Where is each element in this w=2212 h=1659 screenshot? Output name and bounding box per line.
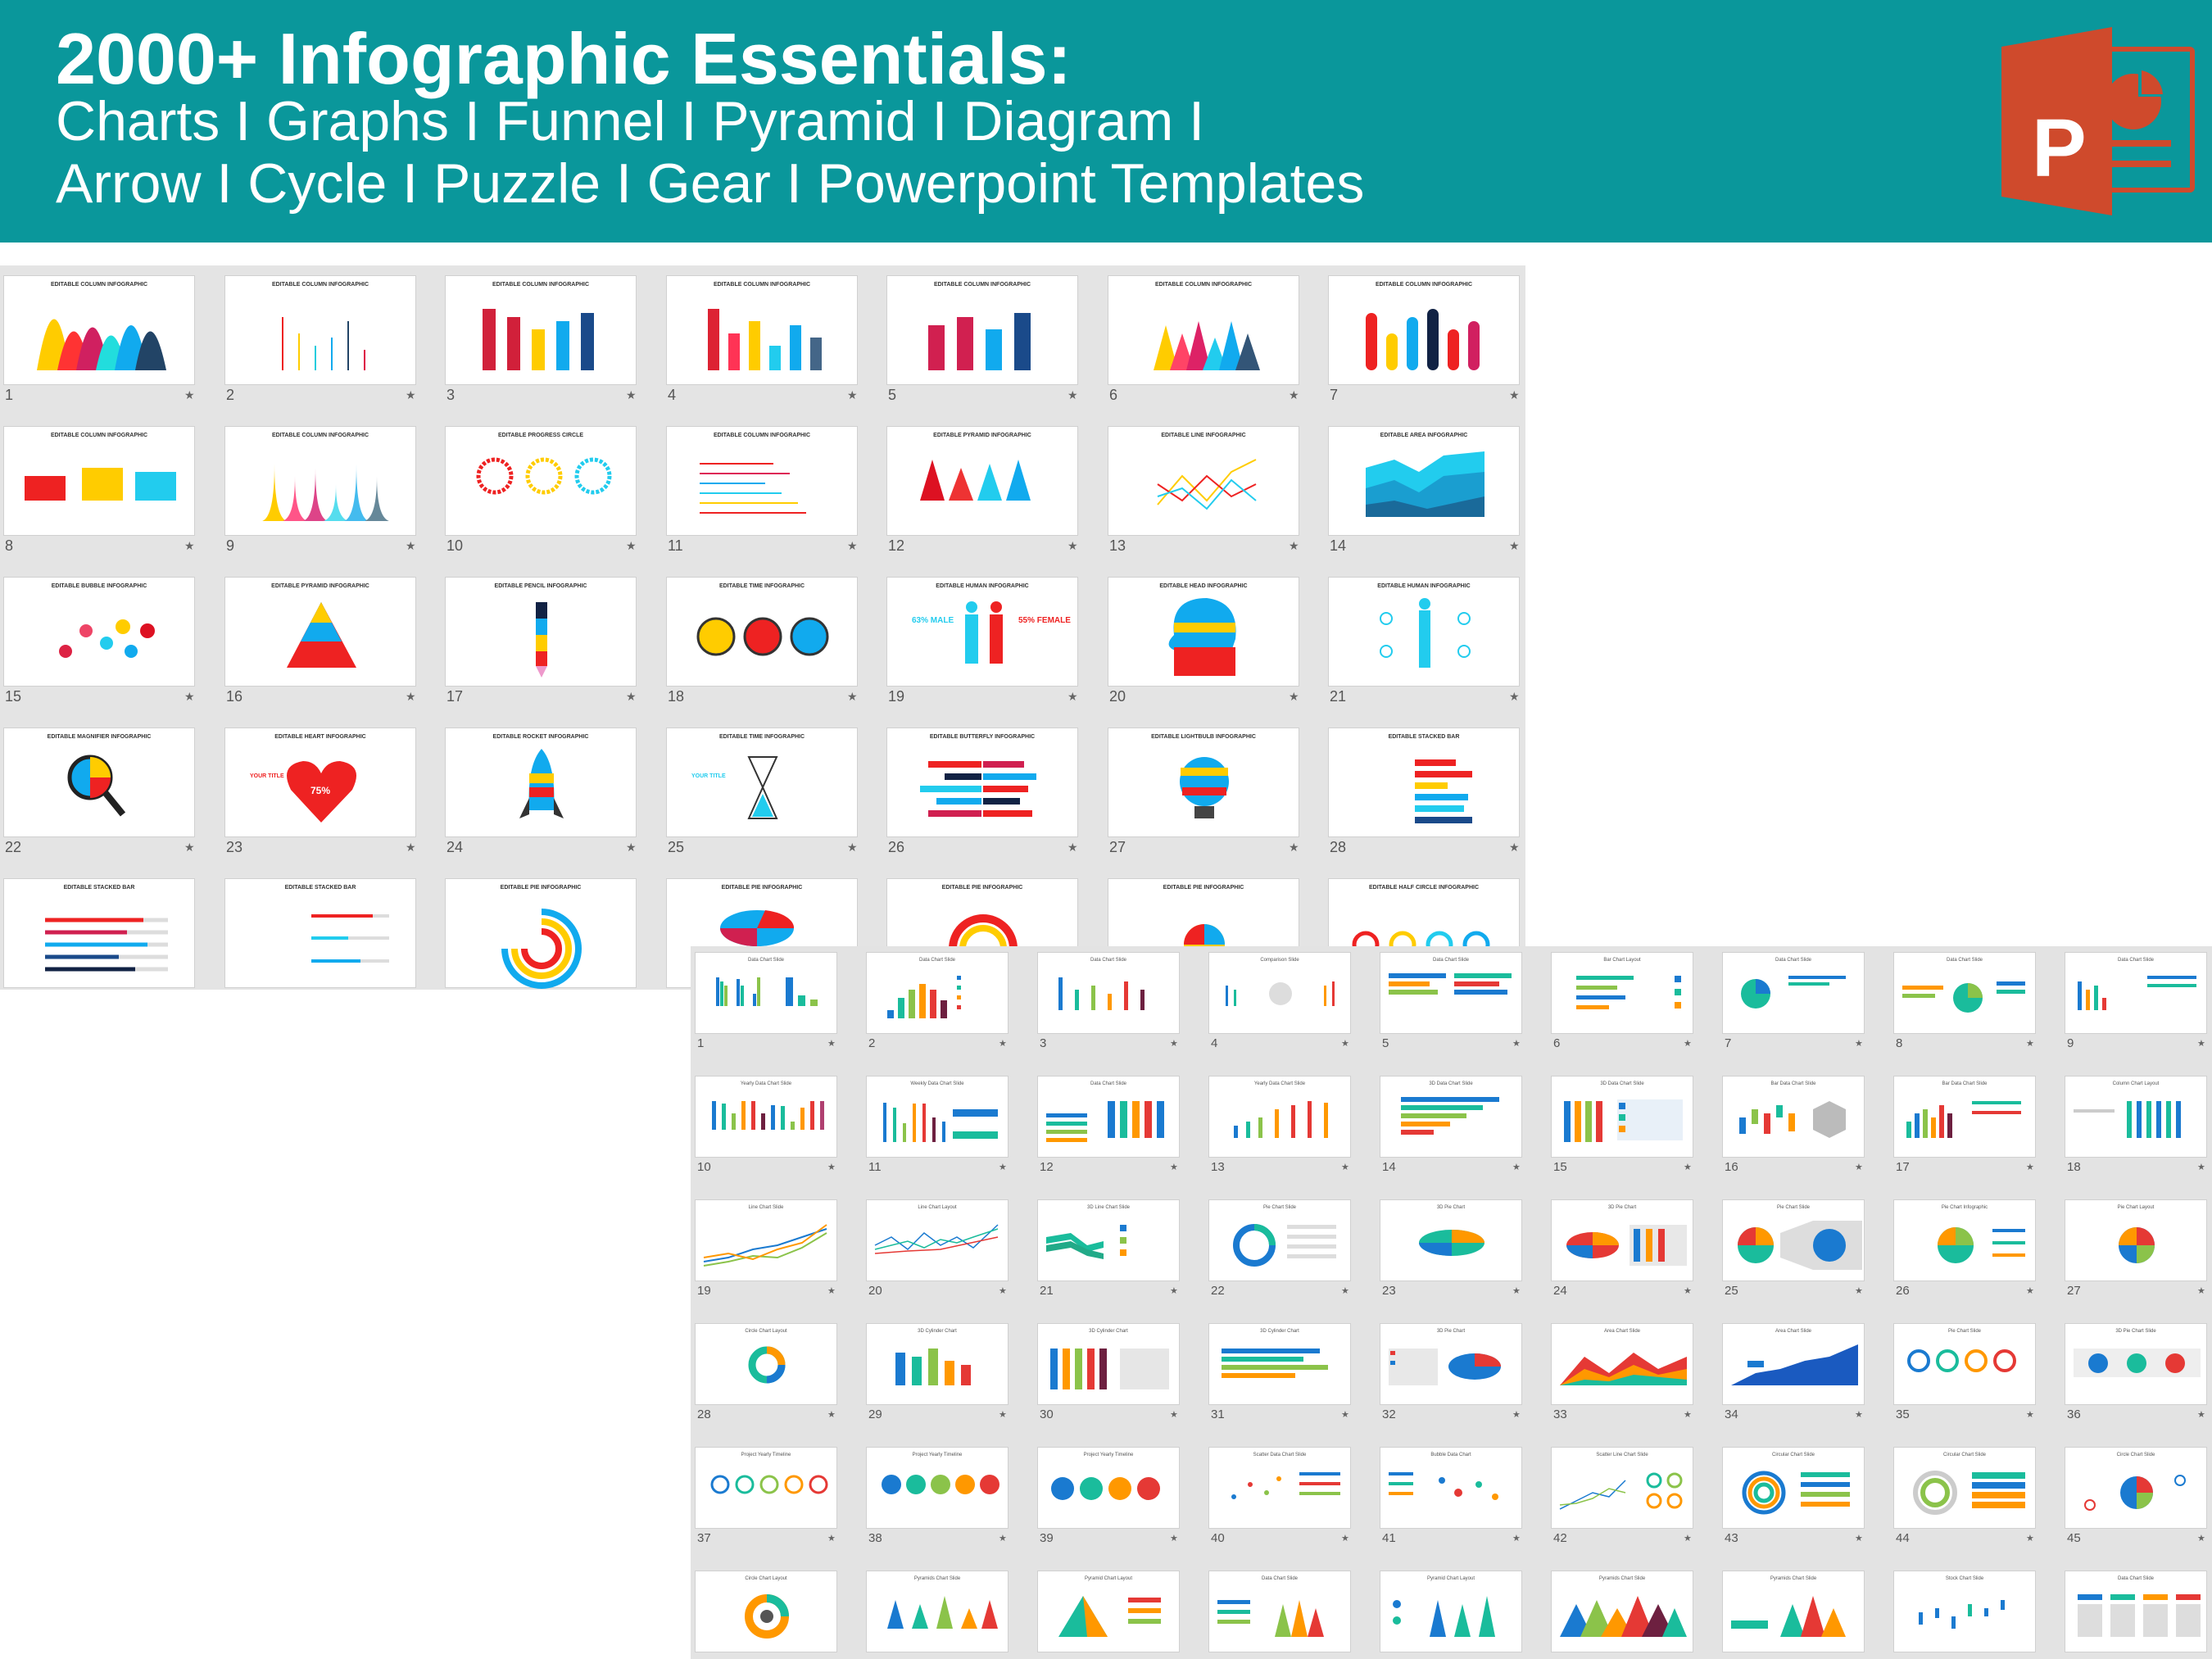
thumb 31: [445, 878, 637, 988]
slide numbers top grid: 18: [668, 688, 684, 705]
thumb 1: [3, 275, 195, 385]
row 6 thumbs: Pyramid Chart Layout: [1085, 1576, 1132, 1581]
slide numbers top grid: ★: [406, 539, 416, 552]
thumb 35: EDITABLE HALF CIRCLE INFOGRAPHIC: [1369, 885, 1479, 891]
slide numbers bottom grid: ★: [827, 1039, 836, 1049]
row 1 thumbs: Data Chart Slide: [919, 958, 955, 963]
thumb 21: EDITABLE HUMAN INFOGRAPHIC: [1377, 583, 1471, 589]
row 3 thumbs: Pie Chart Layout: [2118, 1205, 2154, 1210]
slide numbers bottom grid: ★: [2197, 1286, 2205, 1296]
row 2 thumbs: [695, 1076, 2207, 1158]
slide numbers bottom grid: 36: [2067, 1407, 2081, 1421]
row 1 thumbs: Data Chart Slide: [1775, 958, 1811, 963]
slide numbers top grid: ★: [626, 388, 637, 401]
slide numbers top grid: 21: [1330, 688, 1346, 705]
row 1 thumbs: Data Chart Slide: [2118, 958, 2154, 963]
row 3 thumbs: Line Chart Slide: [749, 1205, 783, 1210]
thumb 16: [224, 577, 416, 687]
thumb 21: [1328, 577, 1520, 687]
slide numbers top grid: 5: [888, 387, 896, 403]
thumb 10: [445, 426, 637, 536]
row 1 thumbs: [695, 952, 2207, 1034]
thumb 2: EDITABLE COLUMN INFOGRAPHIC: [272, 282, 369, 288]
thumb 35: [1328, 878, 1520, 988]
row 3 thumbs: [695, 1199, 2207, 1281]
thumb 6: [1108, 275, 1299, 385]
thumb 5: EDITABLE COLUMN INFOGRAPHIC: [934, 282, 1031, 288]
row 2 thumbs: 3D Data Chart Slide: [1429, 1081, 1473, 1086]
slide numbers bottom grid: 44: [1896, 1531, 1910, 1545]
thumb 7: [1328, 275, 1520, 385]
slide numbers bottom grid: ★: [2026, 1163, 2034, 1172]
slide numbers bottom grid: ★: [1684, 1286, 1692, 1296]
slide numbers bottom grid: 16: [1725, 1160, 1738, 1174]
slide numbers bottom grid: 4: [1211, 1036, 1217, 1050]
slide numbers top grid: ★: [406, 690, 416, 703]
slide numbers top grid: ★: [1289, 841, 1299, 854]
slide numbers bottom grid: ★: [1855, 1039, 1863, 1049]
row 4 thumbs: 3D Pie Chart Slide: [2115, 1329, 2156, 1334]
slide numbers bottom grid: ★: [827, 1163, 836, 1172]
slide numbers top grid: ★: [184, 841, 195, 854]
slide numbers top grid: 24: [446, 839, 463, 855]
slide numbers bottom grid: 15: [1553, 1160, 1567, 1174]
slide numbers bottom grid: 26: [1896, 1284, 1910, 1298]
subtitle line 2: Arrow I Cycle I Puzzle I Gear I Powerpoint Templates: [56, 152, 1364, 215]
slide numbers bottom grid: 30: [1040, 1407, 1054, 1421]
slide numbers top grid: ★: [1289, 388, 1299, 401]
slide numbers top grid: ★: [1509, 388, 1520, 401]
slide numbers top grid: 26: [888, 839, 904, 855]
thumb 19: 63% MALE: [912, 616, 954, 625]
header band: [0, 0, 2212, 243]
row 6 thumbs: Circle Chart Layout: [745, 1576, 787, 1581]
title: 2000+ Infographic Essentials:: [56, 18, 1072, 99]
slide numbers top grid: 19: [888, 688, 904, 705]
thumb 31: EDITABLE PIE INFOGRAPHIC: [501, 885, 581, 891]
slide numbers bottom grid: ★: [1170, 1163, 1178, 1172]
thumb 28: EDITABLE STACKED BAR: [1389, 734, 1459, 740]
row 2 thumbs: Yearly Data Chart Slide: [741, 1081, 791, 1086]
thumb 13: [1108, 426, 1299, 536]
slide numbers bottom grid: ★: [2197, 1039, 2205, 1049]
row 4 thumbs: Area Chart Slide: [1775, 1329, 1811, 1334]
slide numbers bottom grid: 25: [1725, 1284, 1738, 1298]
row 4 thumbs: [695, 1323, 2207, 1405]
row 3 thumbs: Line Chart Layout: [918, 1205, 957, 1210]
slide numbers bottom grid: ★: [1512, 1410, 1521, 1420]
slide numbers top grid: 4: [668, 387, 676, 403]
thumb 34: EDITABLE PIE INFOGRAPHIC: [1163, 885, 1244, 891]
slide numbers top grid: 17: [446, 688, 463, 705]
slide numbers top grid: 1: [5, 387, 13, 403]
slide numbers top grid: ★: [847, 841, 858, 854]
slide numbers bottom grid: 23: [1382, 1284, 1396, 1298]
row 6 thumbs: Pyramid Chart Layout: [1427, 1576, 1475, 1581]
slide numbers bottom grid: 17: [1896, 1160, 1910, 1174]
slide numbers top grid: ★: [184, 388, 195, 401]
thumb 34: [1108, 878, 1299, 988]
row 2 thumbs: Yearly Data Chart Slide: [1254, 1081, 1305, 1086]
thumb 8: [3, 426, 195, 536]
thumb 2: [224, 275, 416, 385]
slide numbers bottom grid: 18: [2067, 1160, 2081, 1174]
thumb 10: EDITABLE PROGRESS CIRCLE: [498, 433, 583, 438]
thumb 23: [224, 728, 416, 837]
slide numbers top grid: ★: [626, 690, 637, 703]
slide numbers bottom grid: 3: [1040, 1036, 1046, 1050]
slide numbers bottom grid: 35: [1896, 1407, 1910, 1421]
thumb 19: [886, 577, 1078, 687]
row 5 thumbs: Scatter Line Chart Slide: [1596, 1453, 1648, 1457]
thumb 17: EDITABLE PENCIL INFOGRAPHIC: [495, 583, 587, 589]
slide numbers bottom grid: 45: [2067, 1531, 2081, 1545]
slide numbers bottom grid: 40: [1211, 1531, 1225, 1545]
row 5 thumbs: Circular Chart Slide: [1772, 1453, 1815, 1457]
thumb 29: [3, 878, 195, 988]
row 4 thumbs: Circle Chart Layout: [745, 1329, 787, 1334]
slide numbers top grid: 9: [226, 537, 234, 554]
slide numbers bottom grid: 39: [1040, 1531, 1054, 1545]
row 5 thumbs: [695, 1447, 2207, 1529]
slide numbers bottom grid: ★: [2026, 1410, 2034, 1420]
thumb 19: 55% FEMALE: [1018, 616, 1071, 625]
row 3 thumbs: 3D Pie Chart: [1608, 1205, 1636, 1210]
slide numbers bottom grid: ★: [999, 1163, 1007, 1172]
slide numbers bottom grid: ★: [1512, 1286, 1521, 1296]
thumb 24: [445, 728, 637, 837]
thumb 24: EDITABLE ROCKET INFOGRAPHIC: [493, 734, 588, 740]
slide numbers bottom grid: ★: [999, 1039, 1007, 1049]
row 1 thumbs: Data Chart Slide: [1947, 958, 1983, 963]
slide numbers bottom grid: 29: [868, 1407, 882, 1421]
icon: powerpoint logo: [2001, 27, 2195, 215]
row 4 thumbs: 3D Cylinder Chart: [1089, 1329, 1128, 1334]
slide numbers top grid: 20: [1109, 688, 1126, 705]
thumb 15: EDITABLE BUBBLE INFOGRAPHIC: [52, 583, 147, 589]
slide numbers bottom grid: 41: [1382, 1531, 1396, 1545]
slide numbers top grid: ★: [847, 539, 858, 552]
row 1 thumbs: Data Chart Slide: [1090, 958, 1126, 963]
row 5 thumbs: Scatter Data Chart Slide: [1253, 1453, 1306, 1457]
thumb 22: EDITABLE MAGNIFIER INFOGRAPHIC: [48, 734, 151, 740]
slide numbers top grid: 2: [226, 387, 234, 403]
slide numbers bottom grid: 27: [2067, 1284, 2081, 1298]
thumb 9: [224, 426, 416, 536]
icon: powerpoint logo: P: [2032, 102, 2087, 194]
thumb 7: EDITABLE COLUMN INFOGRAPHIC: [1376, 282, 1472, 288]
row 2 thumbs: Data Chart Slide: [1090, 1081, 1126, 1086]
slide numbers bottom grid: ★: [1341, 1163, 1349, 1172]
slide numbers bottom grid: 13: [1211, 1160, 1225, 1174]
slide numbers bottom grid: 42: [1553, 1531, 1567, 1545]
slide numbers bottom grid: ★: [1855, 1286, 1863, 1296]
thumb 16: EDITABLE PYRAMID INFOGRAPHIC: [271, 583, 369, 589]
row 6 thumbs: Pyramids Chart Slide: [914, 1576, 960, 1581]
slide numbers top grid: ★: [626, 539, 637, 552]
thumb 6: EDITABLE COLUMN INFOGRAPHIC: [1155, 282, 1252, 288]
thumb 18: EDITABLE TIME INFOGRAPHIC: [719, 583, 805, 589]
thumb 20: EDITABLE HEAD INFOGRAPHIC: [1159, 583, 1248, 589]
slide numbers top grid: 3: [446, 387, 455, 403]
slide numbers bottom grid: ★: [1855, 1410, 1863, 1420]
slide numbers top grid: 8: [5, 537, 13, 554]
slide numbers bottom grid: ★: [1341, 1410, 1349, 1420]
panel: bottom slide grid: [691, 946, 2212, 1659]
row 4 thumbs: 3D Cylinder Chart: [918, 1329, 957, 1334]
slide numbers bottom grid: 9: [2067, 1036, 2074, 1050]
slide numbers bottom grid: 14: [1382, 1160, 1396, 1174]
slide numbers bottom grid: 11: [868, 1160, 882, 1174]
row 1 thumbs: Data Chart Slide: [1433, 958, 1469, 963]
thumb 29: EDITABLE STACKED BAR: [64, 885, 134, 891]
thumb 5: [886, 275, 1078, 385]
slide numbers bottom grid: ★: [1855, 1163, 1863, 1172]
slide numbers bottom grid: ★: [1170, 1286, 1178, 1296]
row 5 thumbs: Project Yearly Timeline: [913, 1453, 962, 1457]
slide numbers bottom grid: 8: [1896, 1036, 1902, 1050]
row 5 thumbs: Circular Chart Slide: [1943, 1453, 1986, 1457]
slide numbers bottom grid: ★: [999, 1534, 1007, 1543]
thumb 28: [1328, 728, 1520, 837]
thumb 1: EDITABLE COLUMN INFOGRAPHIC: [51, 282, 147, 288]
slide numbers bottom grid: 24: [1553, 1284, 1567, 1298]
slide numbers top grid: ★: [184, 690, 195, 703]
row 5 thumbs: Circle Chart Slide: [2117, 1453, 2155, 1457]
slide numbers bottom grid: 19: [697, 1284, 711, 1298]
slide numbers top grid: 7: [1330, 387, 1338, 403]
thumb 3: EDITABLE COLUMN INFOGRAPHIC: [492, 282, 589, 288]
thumb 15: [3, 577, 195, 687]
row 6 thumbs: Pyramids Chart Slide: [1770, 1576, 1816, 1581]
slide numbers bottom grid: ★: [2026, 1039, 2034, 1049]
slide numbers top grid: ★: [1509, 539, 1520, 552]
thumb 4: EDITABLE COLUMN INFOGRAPHIC: [714, 282, 810, 288]
slide numbers bottom grid: 21: [1040, 1284, 1054, 1298]
row 5 thumbs: Project Yearly Timeline: [741, 1453, 791, 1457]
slide numbers bottom grid: ★: [1684, 1534, 1692, 1543]
slide numbers top grid: ★: [626, 841, 637, 854]
thumb 13: EDITABLE LINE INFOGRAPHIC: [1161, 433, 1246, 438]
row 2 thumbs: Column Chart Layout: [2113, 1081, 2159, 1086]
slide numbers top grid: ★: [406, 388, 416, 401]
row 6 thumbs: Data Chart Slide: [2118, 1576, 2154, 1581]
slide numbers bottom grid: 1: [697, 1036, 704, 1050]
row 3 thumbs: Pie Chart Slide: [1777, 1205, 1810, 1210]
slide numbers bottom grid: ★: [1341, 1286, 1349, 1296]
slide numbers top grid: 14: [1330, 537, 1346, 554]
row 3 thumbs: 3D Pie Chart: [1437, 1205, 1465, 1210]
slide numbers top grid: ★: [1067, 388, 1078, 401]
slide numbers top grid: 13: [1109, 537, 1126, 554]
subtitle line 1: Charts I Graphs I Funnel I Pyramid I Diagram I: [56, 90, 1204, 152]
slide numbers top grid: 15: [5, 688, 21, 705]
slide numbers bottom grid: ★: [1170, 1039, 1178, 1049]
row 1 thumbs: Data Chart Slide: [748, 958, 784, 963]
slide numbers bottom grid: ★: [827, 1410, 836, 1420]
thumb 25: [666, 728, 858, 837]
slide numbers top grid: [5, 387, 1520, 855]
slide numbers bottom grid: ★: [1512, 1534, 1521, 1543]
slide numbers top grid: 6: [1109, 387, 1117, 403]
thumb 8: EDITABLE COLUMN INFOGRAPHIC: [51, 433, 147, 438]
slide numbers bottom grid: 12: [1040, 1160, 1054, 1174]
row 3 thumbs: Pie Chart Slide: [1263, 1205, 1296, 1210]
slide numbers bottom grid: 7: [1725, 1036, 1731, 1050]
slide numbers bottom grid: ★: [1684, 1039, 1692, 1049]
slide numbers bottom grid: 32: [1382, 1407, 1396, 1421]
slide numbers top grid: ★: [847, 388, 858, 401]
slide numbers bottom grid: ★: [1341, 1534, 1349, 1543]
row 2 thumbs: Bar Data Chart Slide: [1770, 1081, 1816, 1086]
slide numbers bottom grid: ★: [1512, 1163, 1521, 1172]
slide numbers top grid: 12: [888, 537, 904, 554]
slide numbers bottom grid: 28: [697, 1407, 711, 1421]
thumb 3: [445, 275, 637, 385]
row 4 thumbs: 3D Cylinder Chart: [1260, 1329, 1299, 1334]
row 6 thumbs: Pyramids Chart Slide: [1599, 1576, 1645, 1581]
slide numbers bottom grid: ★: [2197, 1410, 2205, 1420]
slide numbers bottom grid: ★: [2197, 1534, 2205, 1543]
slide numbers top grid: 10: [446, 537, 463, 554]
row 4 thumbs: Area Chart Slide: [1604, 1329, 1640, 1334]
row 2 thumbs: 3D Data Chart Slide: [1600, 1081, 1644, 1086]
slide numbers bottom grid: ★: [1855, 1534, 1863, 1543]
thumb 30: [224, 878, 416, 988]
slide numbers bottom grid: ★: [1170, 1410, 1178, 1420]
slide numbers top grid: 11: [668, 537, 683, 554]
row 5 thumbs: Project Yearly Timeline: [1084, 1453, 1133, 1457]
thumb 26: [886, 728, 1078, 837]
row 5 thumbs: Bubble Data Chart: [1430, 1453, 1471, 1457]
row 2 thumbs: Weekly Data Chart Slide: [910, 1081, 964, 1086]
slide numbers top grid: 16: [226, 688, 243, 705]
row 6 thumbs: [695, 1571, 2207, 1652]
slide numbers bottom grid: 20: [868, 1284, 882, 1298]
slide numbers bottom grid: 2: [868, 1036, 875, 1050]
slide numbers bottom grid: 43: [1725, 1531, 1738, 1545]
slide numbers bottom grid: ★: [1341, 1039, 1349, 1049]
slide numbers bottom grid: 31: [1211, 1407, 1225, 1421]
thumb 9: EDITABLE COLUMN INFOGRAPHIC: [272, 433, 369, 438]
panel: top slide grid: [0, 265, 1525, 990]
thumb 20: [1108, 577, 1299, 687]
slide numbers top grid: ★: [1067, 690, 1078, 703]
thumb 22: [3, 728, 195, 837]
thumb 14: EDITABLE AREA INFOGRAPHIC: [1380, 433, 1467, 438]
slide numbers bottom grid: 6: [1553, 1036, 1560, 1050]
slide numbers bottom grid: ★: [1684, 1163, 1692, 1172]
slide numbers bottom grid: ★: [999, 1410, 1007, 1420]
slide numbers bottom grid: ★: [827, 1534, 836, 1543]
thumb 23: EDITABLE HEART INFOGRAPHIC: [274, 734, 366, 740]
slide numbers bottom grid: 38: [868, 1531, 882, 1545]
row 4 thumbs: 3D Pie Chart: [1437, 1329, 1465, 1334]
thumb 4: [666, 275, 858, 385]
slide numbers bottom grid: ★: [999, 1286, 1007, 1296]
slide numbers bottom grid: ★: [827, 1286, 836, 1296]
thumb 33: EDITABLE PIE INFOGRAPHIC: [942, 885, 1022, 891]
slide numbers bottom grid: ★: [1512, 1039, 1521, 1049]
thumb 14: [1328, 426, 1520, 536]
slide numbers top grid: 27: [1109, 839, 1126, 855]
row 1 thumbs: Bar Chart Layout: [1603, 958, 1641, 963]
slide numbers bottom grid: 34: [1725, 1407, 1738, 1421]
slide numbers top grid: 22: [5, 839, 21, 855]
thumb 11: EDITABLE COLUMN INFOGRAPHIC: [714, 433, 810, 438]
slide numbers bottom grid: ★: [2026, 1534, 2034, 1543]
slide numbers top grid: 25: [668, 839, 684, 855]
slide numbers top grid: ★: [1509, 690, 1520, 703]
row 4 thumbs: Pie Chart Slide: [1948, 1329, 1981, 1334]
slide numbers bottom grid: ★: [1170, 1534, 1178, 1543]
slide numbers top grid: ★: [184, 539, 195, 552]
thumb 11: [666, 426, 858, 536]
row 6 thumbs: Stock Chart Slide: [1946, 1576, 1983, 1581]
row 3 thumbs: 3D Line Chart Slide: [1087, 1205, 1130, 1210]
thumb 32: EDITABLE PIE INFOGRAPHIC: [722, 885, 802, 891]
slide numbers bottom grid: 10: [697, 1160, 711, 1174]
slide numbers bottom grid: 5: [1382, 1036, 1389, 1050]
thumb 12: EDITABLE PYRAMID INFOGRAPHIC: [933, 433, 1031, 438]
slide numbers top grid: 23: [226, 839, 243, 855]
row 2 thumbs: Bar Data Chart Slide: [1942, 1081, 1988, 1086]
slide numbers bottom grid: 37: [697, 1531, 711, 1545]
slide numbers bottom grid: ★: [2026, 1286, 2034, 1296]
slide numbers bottom grid: 33: [1553, 1407, 1567, 1421]
slide numbers top grid: ★: [1067, 539, 1078, 552]
thumb 32: [666, 878, 858, 988]
thumb 27: EDITABLE LIGHTBULB INFOGRAPHIC: [1151, 734, 1256, 740]
thumb 23: 75%: [310, 785, 330, 796]
slide numbers top grid: ★: [406, 841, 416, 854]
slide numbers top grid: ★: [1289, 690, 1299, 703]
slide numbers top grid: ★: [1509, 841, 1520, 854]
slide numbers top grid: ★: [1067, 841, 1078, 854]
thumb 26: EDITABLE BUTTERFLY INFOGRAPHIC: [930, 734, 1035, 740]
slide numbers top grid: ★: [1289, 539, 1299, 552]
thumb 27: [1108, 728, 1299, 837]
thumb 17: [445, 577, 637, 687]
thumb 30: EDITABLE STACKED BAR: [285, 885, 356, 891]
thumb 19: EDITABLE HUMAN INFOGRAPHIC: [936, 583, 1029, 589]
slide numbers top grid: 28: [1330, 839, 1346, 855]
slide numbers bottom grid: [697, 1036, 2205, 1545]
thumb 25: EDITABLE TIME INFOGRAPHIC: [719, 734, 805, 740]
thumb 23: YOUR TITLE: [250, 773, 284, 779]
row 6 thumbs: Data Chart Slide: [1262, 1576, 1298, 1581]
thumb 33: [886, 878, 1078, 988]
thumb 12: [886, 426, 1078, 536]
slide numbers bottom grid: ★: [1684, 1410, 1692, 1420]
thumb 25: YOUR TITLE: [691, 773, 726, 779]
row 3 thumbs: Pie Chart Infographic: [1942, 1205, 1988, 1210]
slide numbers bottom grid: ★: [2197, 1163, 2205, 1172]
slide numbers top grid: ★: [847, 690, 858, 703]
thumb 18: [666, 577, 858, 687]
slide numbers bottom grid: 22: [1211, 1284, 1225, 1298]
row 1 thumbs: Comparison Slide: [1260, 958, 1299, 963]
